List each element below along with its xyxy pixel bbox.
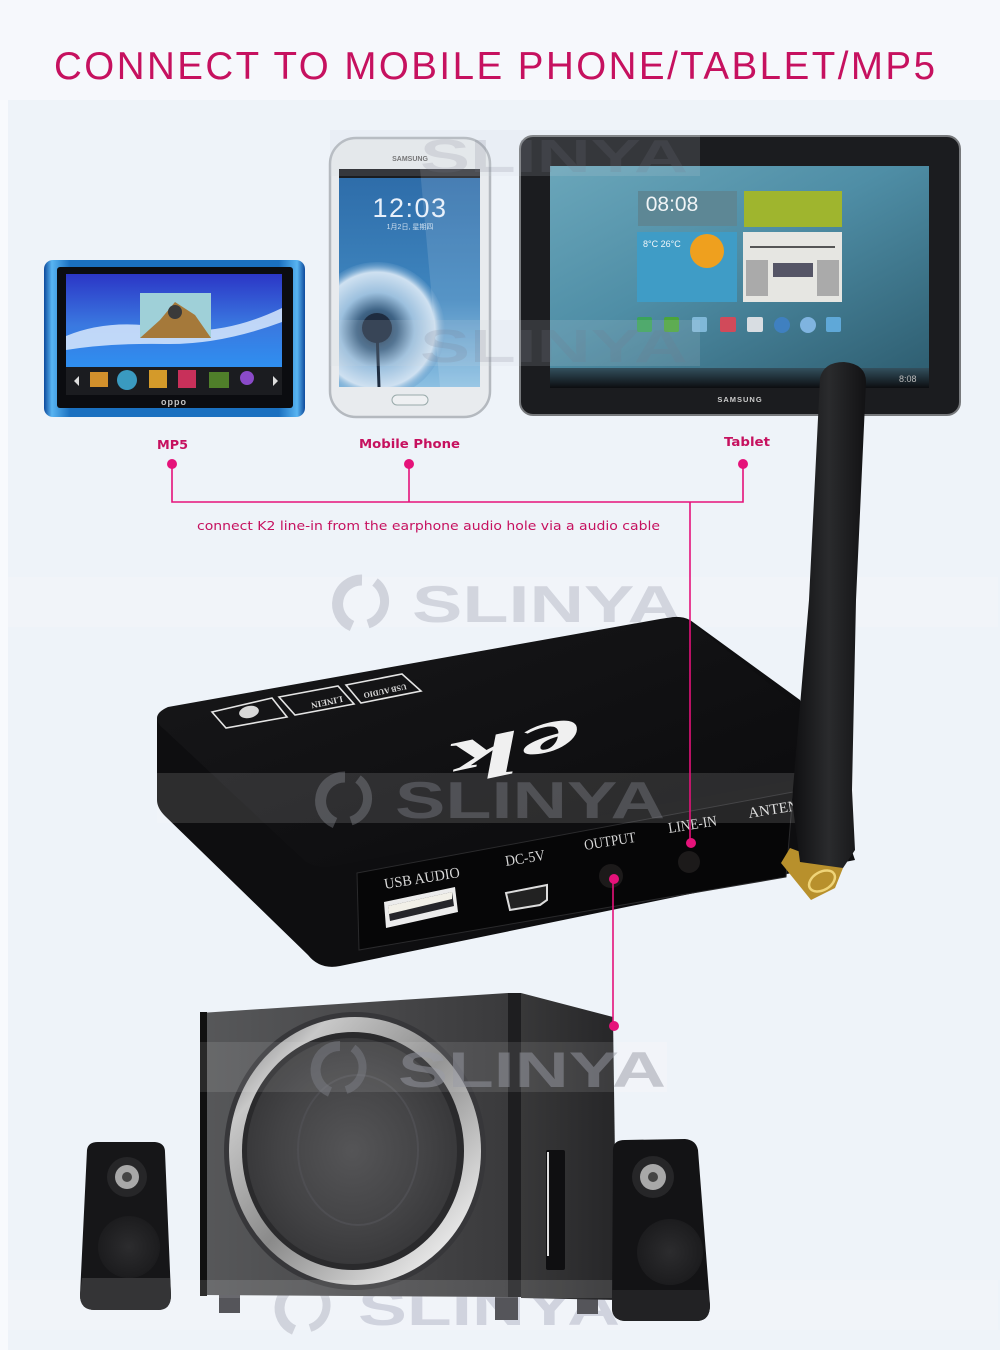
icon: right speaker (612, 1139, 710, 1321)
tablet news widget (743, 232, 842, 302)
tablet clock widget: 08:08 (646, 193, 698, 216)
connector lines (172, 464, 743, 1026)
watermark: bottom: SLINYA (358, 1280, 620, 1336)
port labels: USB AUDIO (383, 865, 461, 893)
watermark: over subwoofer: SLINYA (398, 1042, 666, 1098)
watermark: over subwoofer (200, 1042, 667, 1298)
tablet weather widget (637, 232, 737, 302)
watermark: middle: SLINYA (412, 576, 682, 634)
subwoofer side (521, 993, 617, 1300)
line-in jack (678, 851, 700, 873)
icon: mobile phone: 1月2日, 星期四 (387, 223, 433, 231)
MP5 app icons (74, 370, 278, 390)
port labels: LINE-IN (667, 813, 718, 837)
port labels: OUTPUT (583, 830, 637, 854)
icon: mobile phone: SAMSUNG (392, 156, 428, 163)
right speaker tweeter (632, 1156, 674, 1198)
port labels: DC-5V (504, 848, 546, 870)
button: USB AUDIO: USB AUDIO (363, 682, 407, 700)
icon: left speaker (80, 1142, 171, 1310)
left light strip (0, 100, 8, 1350)
watermark: bottom (8, 1280, 998, 1336)
USB port (384, 887, 458, 928)
watermark: over phone and tablet: SLINYA (420, 320, 688, 372)
port labels (383, 798, 800, 893)
box body (157, 617, 855, 967)
subwoofer front (200, 993, 508, 1297)
mini USB port (506, 885, 547, 910)
box logo: ek (443, 704, 589, 797)
tablet image widget (744, 191, 842, 227)
front panel (357, 792, 793, 950)
watermark: over phone and tablet (330, 130, 700, 372)
icon: MP5 player (44, 260, 305, 417)
tablet clock widget (638, 191, 737, 226)
icon: MP5 player: oppo (161, 397, 187, 407)
icon: mobile phone: 12:03 (372, 193, 448, 223)
output jack (599, 864, 623, 888)
title: CONNECT TO MOBILE PHONE/TABLET/MP5 (54, 45, 935, 88)
watermark: middle (8, 576, 998, 634)
subwoofer ring (224, 1012, 486, 1290)
watermark: band over box: SLINYA (395, 772, 665, 830)
label: MP5: MP5 (157, 437, 188, 452)
right speaker driver (637, 1219, 703, 1285)
port labels: ANTEN (747, 798, 800, 822)
left speaker tweeter (107, 1157, 147, 1197)
connector dots (167, 459, 748, 1031)
icon: antenna (781, 362, 866, 900)
tablet app icons (637, 317, 841, 333)
MP5 thumbnail (140, 293, 211, 338)
label: Mobile Phone: Mobile Phone (359, 436, 460, 451)
gold connector (781, 848, 843, 900)
icon: tablet (520, 136, 960, 415)
box top buttons (212, 674, 421, 728)
watermark: over phone and tablet: SLINYA (420, 130, 688, 182)
button: LINEIN: LINEIN (310, 694, 344, 711)
top band (0, 0, 1000, 100)
tablet weather widget: 8°C 26°C (643, 239, 681, 249)
icon: K2 box (157, 617, 855, 967)
button: android (238, 704, 260, 720)
icon: subwoofer (200, 993, 617, 1320)
icon: mobile phone (309, 138, 490, 417)
subwoofer cone (247, 1038, 457, 1264)
subwoofer feet (219, 1294, 598, 1320)
label: Tablet: Tablet (724, 434, 770, 449)
left speaker base (80, 1278, 171, 1310)
right speaker base (612, 1290, 710, 1321)
icon: tablet: 8:08 (899, 374, 917, 384)
subwoofer control strip (546, 1150, 565, 1270)
box top face (157, 618, 800, 867)
left speaker driver (98, 1216, 160, 1278)
watermark: band over box (157, 772, 855, 830)
connector caption: connect K2 line-in from the earphone audio hole via a audio cable (197, 518, 660, 533)
dandelion (339, 169, 480, 387)
icon: tablet: SAMSUNG (717, 395, 763, 404)
